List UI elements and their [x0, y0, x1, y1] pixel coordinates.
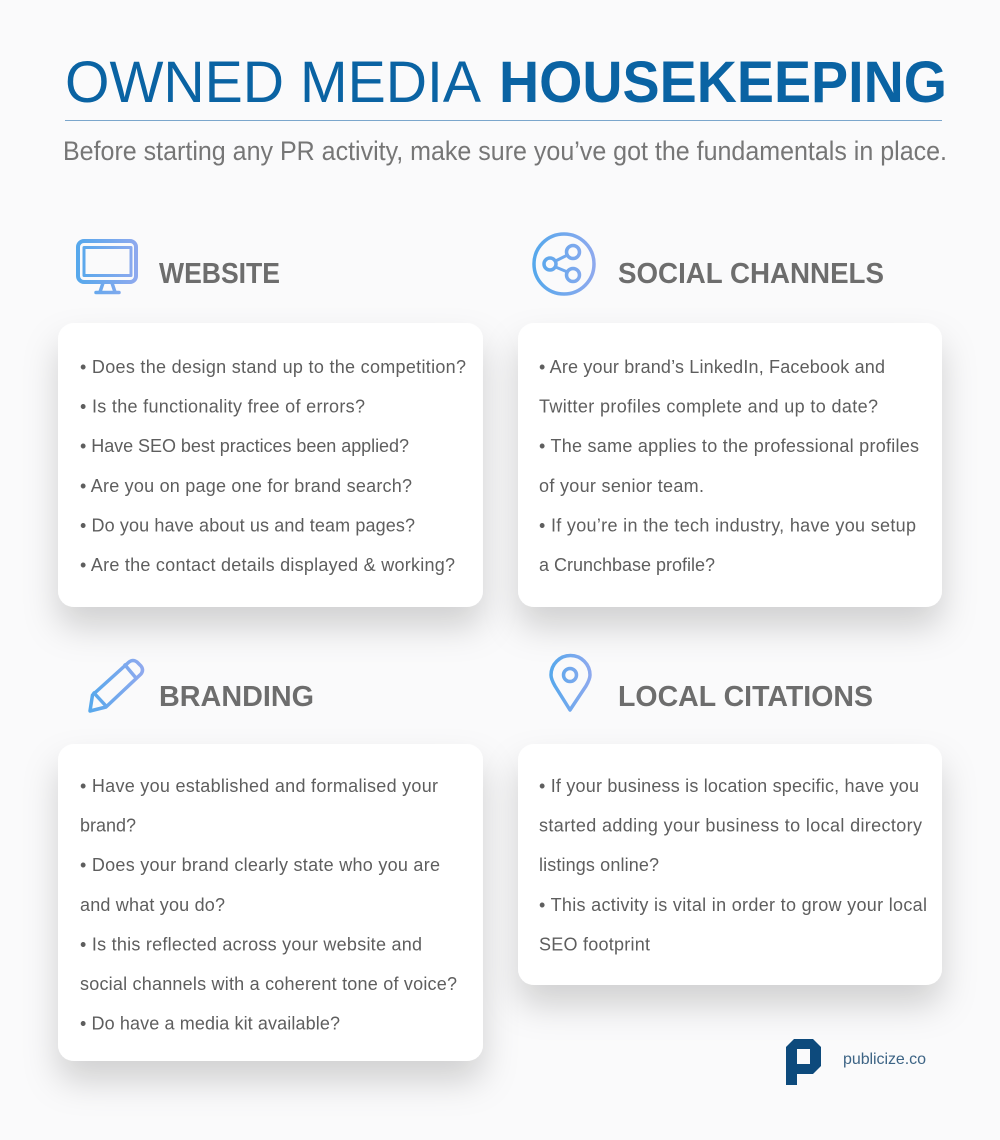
panel: branding: [58, 660, 483, 1061]
text: branding questions: social channels with a coherent tone of voice?: [80, 974, 457, 994]
heading: social channels: SOCIAL CHANNELS: [618, 258, 884, 290]
text: publicize.co: publicize.co: [843, 1051, 926, 1068]
text: branding questions: [80, 776, 457, 1034]
panel: social channels: [518, 234, 942, 607]
text: social channels questions: of your senior team.: [539, 476, 704, 496]
text: local citations questions: • This activity is vital in order to grow your local: [539, 895, 927, 915]
text: local citations questions: SEO footprint: [539, 934, 650, 954]
icon: pencil: [90, 660, 142, 711]
text: social channels questions: [539, 357, 919, 575]
text: local citations questions: started adding your business to local directory: [539, 816, 922, 836]
text: branding questions: • Does your brand clearly state who you are: [80, 855, 440, 875]
text: social channels questions: Twitter profiles complete and up to date?: [539, 397, 878, 417]
text: branding questions: • Is this reflected across your website and: [80, 934, 422, 954]
text: social channels questions: • The same applies to the professional profiles: [539, 436, 919, 456]
text: website questions: • Does the design stand up to the competition?: [80, 357, 466, 377]
panel: local citations: [518, 656, 942, 985]
title: HOUSEKEEPING: [499, 50, 947, 115]
card: website: [58, 323, 483, 607]
text: social channels questions: • Are your brand’s LinkedIn, Facebook and: [539, 357, 885, 377]
heading: branding: BRANDING: [159, 681, 314, 713]
icon: location pin: [551, 656, 590, 710]
subtitle: Before starting any PR activity, make sure you’ve got the fundamentals in place.: [63, 136, 947, 166]
icon: P mark: [786, 1039, 821, 1085]
heading: website: WEBSITE: [159, 258, 280, 290]
text: local citations questions: [539, 776, 927, 954]
text: branding questions: and what you do?: [80, 895, 225, 915]
text: website questions: • Have SEO best practices been applied?: [80, 436, 409, 456]
text: website questions: • Are the contact details displayed & working?: [80, 555, 455, 575]
panel: website: [58, 241, 483, 607]
card: local citations: [518, 744, 942, 985]
card: branding: [58, 744, 483, 1061]
text: website questions: • Do you have about us and team pages?: [80, 515, 415, 535]
logo: publicize: [786, 1039, 926, 1085]
text: local citations questions: listings online?: [539, 855, 659, 875]
text: social channels questions: a Crunchbase profile?: [539, 555, 715, 575]
heading: local citations: LOCAL CITATIONS: [618, 681, 873, 713]
card: social channels: [518, 323, 942, 607]
text: branding questions: brand?: [80, 816, 136, 836]
text: branding questions: • Have you established and formalised your: [80, 776, 438, 796]
text: social channels questions: • If you’re in the tech industry, have you setup: [539, 515, 916, 535]
icon: share: [534, 234, 594, 294]
text: branding questions: • Do have a media kit available?: [80, 1014, 340, 1034]
icon: monitor: [78, 241, 136, 292]
text: local citations questions: • If your business is location specific, have you: [539, 776, 919, 796]
text: website questions: [80, 357, 466, 575]
text: website questions: • Is the functionality free of errors?: [80, 397, 365, 417]
text: website questions: • Are you on page one for brand search?: [80, 476, 412, 496]
title: OWNED MEDIA: [65, 50, 481, 115]
